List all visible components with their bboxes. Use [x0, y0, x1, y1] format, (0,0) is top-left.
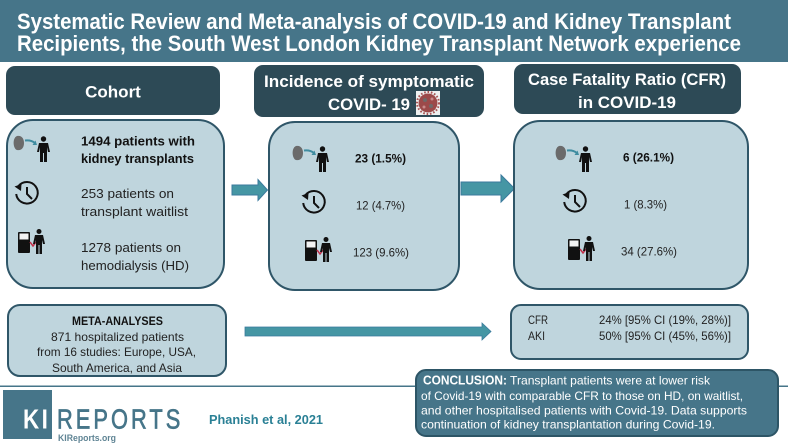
icon: waitlist clock — [562, 190, 586, 212]
value: transplant fatality: 6 (26.1%) — [623, 150, 674, 164]
logo: KI Reports — [3, 390, 183, 443]
heading: Incidence of symptomatic COVID-19 — [254, 65, 484, 117]
icon: kidney transplant recipient — [556, 146, 592, 172]
text: kidney transplants count: 1494 patients with — [81, 134, 195, 148]
panel: pooled results — [511, 305, 748, 359]
panel: incidence — [269, 122, 459, 290]
icon: kidney transplant recipient — [14, 136, 50, 162]
text: waitlist count: transplant waitlist — [81, 204, 188, 219]
logo: KI Reports: KI — [23, 404, 50, 435]
heading: Case Fatality Ratio: in COVID-19 — [578, 93, 676, 112]
panel: conclusion: CONCLUSION: — [423, 374, 507, 388]
panel: meta-analyses: from 16 studies: Europe, USA, — [37, 345, 196, 359]
heading: Incidence of symptomatic COVID-19: Incidence of symptomatic — [264, 72, 474, 91]
heading: Cohort: Cohort — [85, 82, 141, 102]
icon: coronavirus — [416, 91, 440, 115]
logo: KI Reports: REPORTS — [57, 404, 183, 435]
panel: conclusion: Transplant patients were at lower risk — [510, 374, 711, 388]
icon: hemodialysis machine — [568, 236, 595, 261]
panel: meta-analyses: 871 hospitalized patients — [51, 330, 184, 344]
arrow: meta-analyses to results — [245, 323, 491, 340]
title banner — [0, 0, 788, 62]
panel: case fatality — [514, 121, 748, 289]
arrow: cohort to incidence — [232, 180, 268, 200]
heading: Cohort — [6, 66, 220, 115]
panel: pooled results: AKI — [528, 329, 545, 343]
panel: meta-analyses: South America, and Asia — [52, 361, 182, 375]
citation: Phanish et al, 2021 — [209, 412, 323, 427]
value: transplant incidence: 23 (1.5%) — [355, 152, 406, 166]
text: hemodialysis count: hemodialysis (HD) — [81, 258, 189, 273]
value: waitlist incidence: 12 (4.7%) — [356, 198, 405, 212]
panel: cohort — [7, 120, 224, 288]
panel: conclusion — [416, 370, 778, 436]
panel: pooled results: 24% [95% CI (19%, 28%)] — [599, 313, 731, 327]
heading: Incidence of symptomatic COVID-19: COVID- 19 — [328, 95, 410, 114]
text: hemodialysis count: 1278 patients on — [81, 240, 181, 255]
panel: meta-analyses: META-ANALYSES — [72, 316, 163, 328]
text: waitlist count: 253 patients on — [81, 186, 174, 201]
panel: conclusion: continuation of kidney transplantation during Covid-19. — [421, 418, 715, 432]
footer rule — [0, 386, 788, 387]
panel: conclusion: and other hospitalised patients with Covid-19. Data supports — [421, 404, 747, 418]
text: kidney transplants count: kidney transplants — [81, 151, 194, 166]
panel: pooled results: CFR — [528, 313, 548, 327]
icon: hemodialysis machine — [18, 229, 45, 254]
panel: pooled results: 50% [95% CI (45%, 56%)] — [599, 329, 731, 343]
title banner: Systematic Review and Meta-analysis of COVID-19 and Kidney Transplant — [17, 9, 732, 34]
logo: KI Reports: KIReports.org — [58, 433, 116, 443]
arrow: incidence to CFR — [461, 175, 514, 202]
panel: meta-analyses — [8, 305, 226, 376]
icon: waitlist clock — [302, 191, 325, 213]
value: waitlist fatality: 1 (8.3%) — [624, 198, 667, 212]
panel: conclusion: of Covid-19 with comparable CFR to those on HD, on waitlist, — [421, 389, 743, 403]
heading: Case Fatality Ratio: Case Fatality Ratio (CFR) — [528, 70, 726, 89]
title banner: Recipients, the South West London Kidney Transplant Network experience — [17, 31, 741, 56]
icon: hemodialysis machine — [305, 237, 332, 262]
heading: Case Fatality Ratio — [514, 64, 741, 114]
value: hemodialysis fatality: 34 (27.6%) — [621, 244, 677, 258]
icon: waitlist clock — [14, 182, 38, 204]
value: hemodialysis incidence: 123 (9.6%) — [353, 246, 409, 260]
icon: kidney transplant recipient — [293, 146, 329, 172]
